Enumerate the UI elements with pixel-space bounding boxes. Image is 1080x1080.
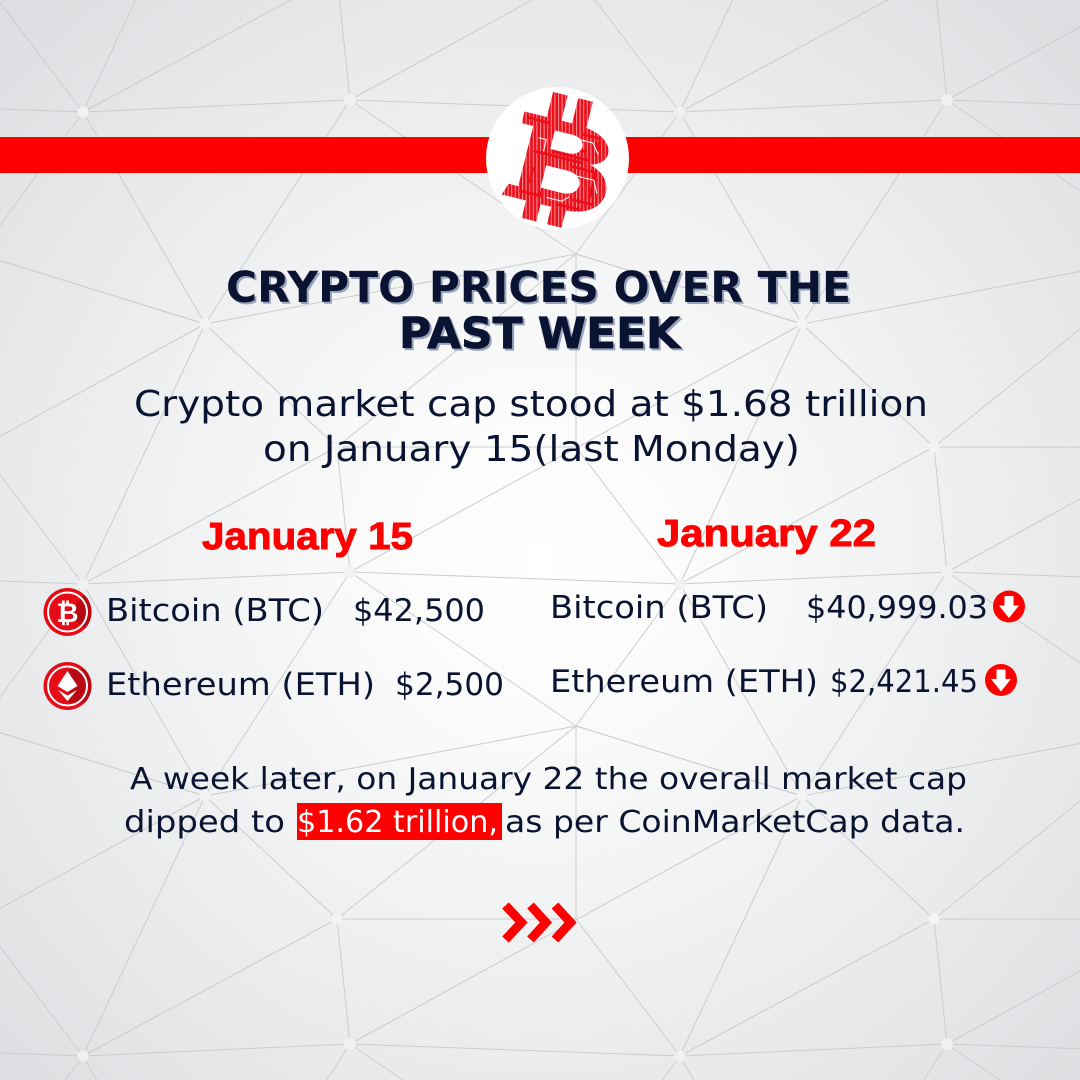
text block: market cap on January 22: as per CoinMarketCap data.	[505, 805, 965, 840]
row: Bitcoin January 15: $42,500	[353, 593, 485, 629]
row: Ethereum January 15: $2,500	[395, 667, 504, 703]
text block: market cap on January 22	[124, 762, 967, 840]
subtitle: market cap on January 15	[134, 384, 928, 470]
row: Bitcoin January 15: Bitcoin (BTC)	[106, 593, 324, 629]
icon: ethereum coin	[44, 662, 92, 710]
heading: January 15: January 15	[202, 516, 413, 558]
row: Ethereum January 22: $2,421.45	[830, 664, 978, 700]
row: Ethereum January 22: Ethereum (ETH)	[550, 664, 818, 700]
row: Bitcoin January 22	[550, 590, 988, 626]
subtitle: market cap on January 15: on January 15(last Monday)	[263, 429, 800, 470]
icon: down arrow bitcoin	[993, 590, 1025, 622]
title	[226, 263, 851, 359]
row: Bitcoin January 22: Bitcoin (BTC)	[550, 590, 768, 626]
icon: bitcoin coin: ₿	[56, 598, 79, 629]
text block: market cap on January 22: A week later, on January 22 the overall market cap	[130, 762, 967, 797]
subtitle: market cap on January 15: Crypto market cap stood at $1.68 trillion	[134, 384, 928, 425]
row: Ethereum January 15	[106, 667, 504, 703]
row: Bitcoin January 22: $40,999.03	[806, 590, 988, 626]
title: CRYPTO PRICES OVER THE	[226, 263, 851, 313]
icon: bitcoin coin	[44, 588, 92, 636]
title: PAST WEEK	[399, 309, 682, 359]
icon: bitcoin circuit logo	[486, 87, 629, 230]
text block: market cap on January 22: dipped to	[124, 805, 285, 840]
row: Bitcoin January 15	[106, 593, 485, 629]
row: Ethereum January 15: Ethereum (ETH)	[106, 667, 375, 703]
row: Ethereum January 22	[550, 664, 978, 700]
highlight: $1.62 trillion: $1.62 trillion,	[297, 805, 498, 840]
icon: down arrow ethereum	[985, 664, 1017, 696]
heading: January 22: January 22	[657, 513, 876, 555]
red header band	[0, 137, 1080, 173]
arrow: next chevrons	[506, 906, 570, 940]
